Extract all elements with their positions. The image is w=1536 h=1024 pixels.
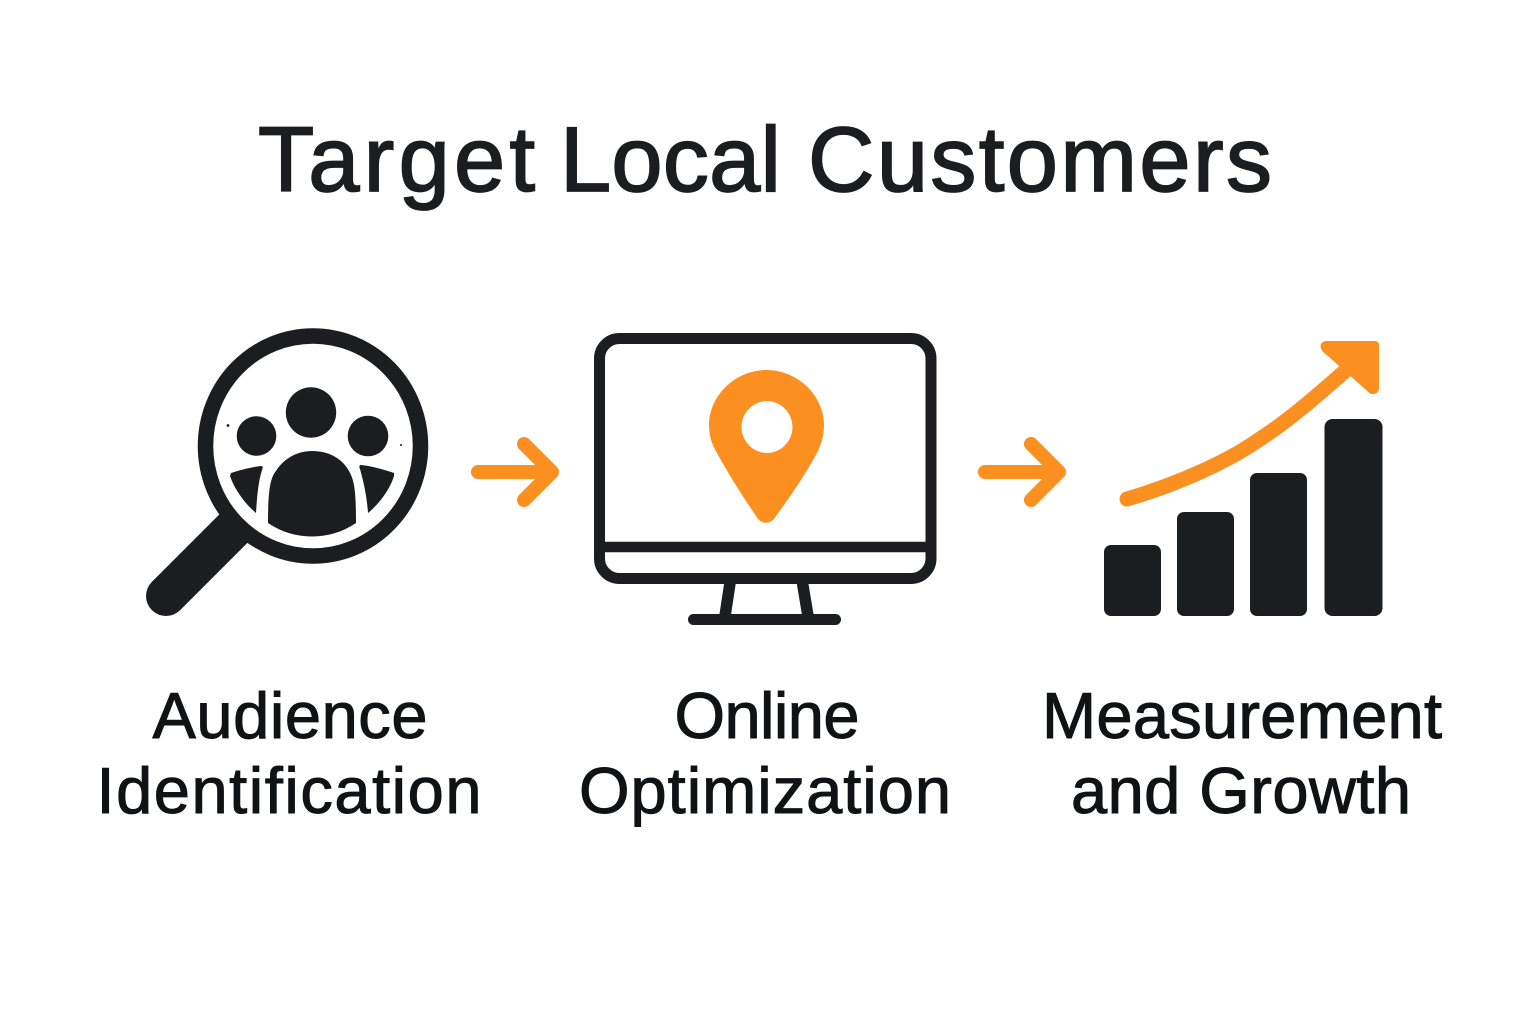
bar 4 xyxy=(1324,419,1382,616)
handle xyxy=(166,524,238,596)
label: online optimization: Online xyxy=(674,679,860,752)
person: left head xyxy=(237,416,276,456)
icon: location pin xyxy=(709,370,824,523)
label: measurement and growth: and Growth xyxy=(1071,754,1411,827)
arrow: step one to step two xyxy=(478,444,552,500)
label: online optimization xyxy=(579,679,951,827)
person: centre body xyxy=(268,451,356,536)
icon: computer monitor with location pin xyxy=(600,338,931,620)
label: measurement and growth xyxy=(1042,679,1442,827)
stand xyxy=(725,583,808,616)
label: measurement and growth: Measurement xyxy=(1042,679,1442,752)
bar 2 xyxy=(1177,512,1234,616)
person: right body xyxy=(359,465,394,513)
label: online optimization: Optimization xyxy=(579,754,951,827)
label: audience identification: Identification xyxy=(96,754,482,827)
person: right head xyxy=(348,416,388,456)
lens ring xyxy=(206,336,420,556)
handle end xyxy=(146,576,186,616)
bar 3 xyxy=(1250,473,1307,616)
label: audience identification xyxy=(96,679,482,827)
arrow: step two to step three xyxy=(985,444,1059,500)
title: Customers xyxy=(808,109,1272,211)
title xyxy=(258,109,1272,211)
person: left body xyxy=(230,466,263,513)
bar 1 xyxy=(1104,545,1161,616)
title: Local xyxy=(560,109,781,211)
label: audience identification: Audience xyxy=(152,679,428,752)
icon: rising bar chart with arrow xyxy=(1104,345,1382,616)
icon: magnifying glass with audience xyxy=(146,336,420,616)
title: Target xyxy=(258,109,535,211)
screen frame xyxy=(600,338,931,578)
growth arrow shaft xyxy=(1127,365,1352,499)
person: centre head xyxy=(286,387,336,438)
growth arrow head xyxy=(1324,345,1375,390)
base xyxy=(694,614,836,625)
